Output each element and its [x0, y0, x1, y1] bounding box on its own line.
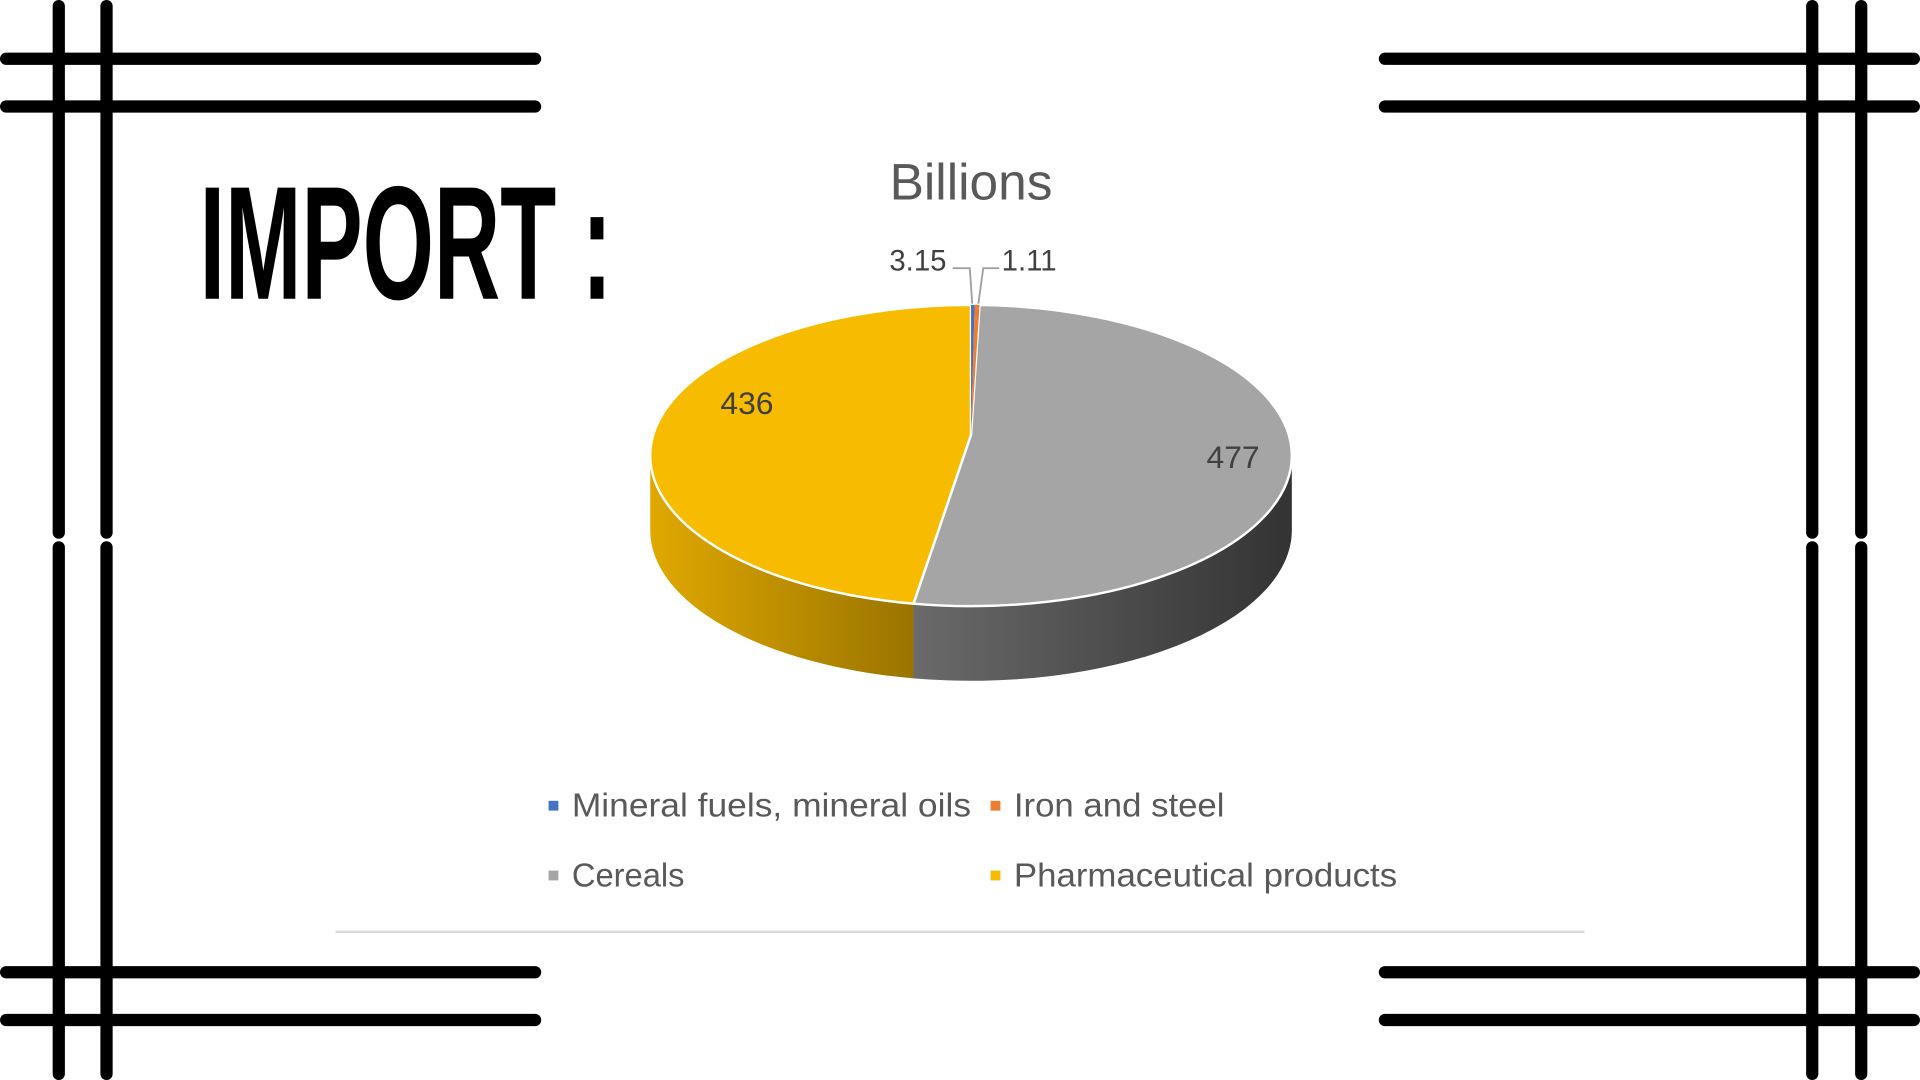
pie side: cereals [913, 456, 1292, 681]
frame: left corner lines [6, 6, 535, 1074]
pie side: pharmaceutical [650, 456, 913, 678]
pie chart: 3.15 [889, 245, 947, 278]
slice: cereals [913, 305, 1292, 606]
data labels: 436 [720, 385, 773, 421]
legend: Pharmaceutical products [1014, 858, 1397, 895]
title: IMPORT : [200, 154, 612, 334]
chart title: Billions [890, 153, 1052, 211]
slice: pharmaceutical [650, 305, 971, 604]
legend: Mineral fuels, mineral oils [572, 788, 971, 825]
slices: minerals / iron [971, 305, 975, 435]
pie chart [650, 245, 1292, 681]
legend: Cereals [572, 858, 684, 895]
frame: right corner lines [1385, 6, 1914, 1074]
pie chart: 1.11 [1002, 245, 1057, 278]
legend [549, 788, 1397, 895]
pie chart: 477 [1207, 439, 1260, 475]
legend: Iron and steel [1014, 788, 1224, 825]
